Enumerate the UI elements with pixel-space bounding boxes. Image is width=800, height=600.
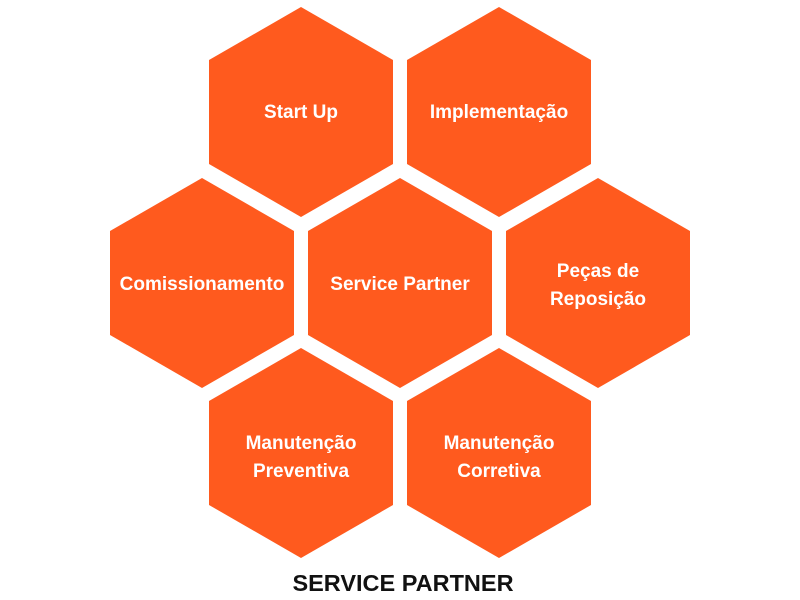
hex: Peças de Reposição bbox=[506, 178, 690, 388]
hex: Implementação bbox=[407, 7, 591, 217]
hex: Manutenção Corretiva: Manutenção bbox=[444, 433, 554, 454]
hex: Manutenção Corretiva bbox=[407, 348, 591, 558]
hex: Start Up bbox=[209, 7, 393, 217]
hex: Service Partner bbox=[308, 178, 492, 388]
hex: Manutenção Preventiva: Preventiva bbox=[253, 461, 349, 482]
hex: Peças de Reposição: Peças de bbox=[557, 261, 639, 282]
hex: Comissionamento: Comissionamento bbox=[120, 274, 284, 295]
hex: Manutenção Corretiva: Corretiva bbox=[457, 461, 541, 482]
hex: Implementação: Implementação bbox=[430, 102, 568, 123]
hex: Manutenção Preventiva: Manutenção bbox=[246, 433, 356, 454]
hex: Service Partner: Service Partner bbox=[330, 274, 470, 295]
hex: Comissionamento bbox=[110, 178, 294, 388]
title: SERVICE PARTNER bbox=[292, 570, 514, 596]
hex: Peças de Reposição: Reposição bbox=[550, 289, 646, 310]
hex: Start Up: Start Up bbox=[264, 102, 338, 123]
hex: Manutenção Preventiva bbox=[209, 348, 393, 558]
